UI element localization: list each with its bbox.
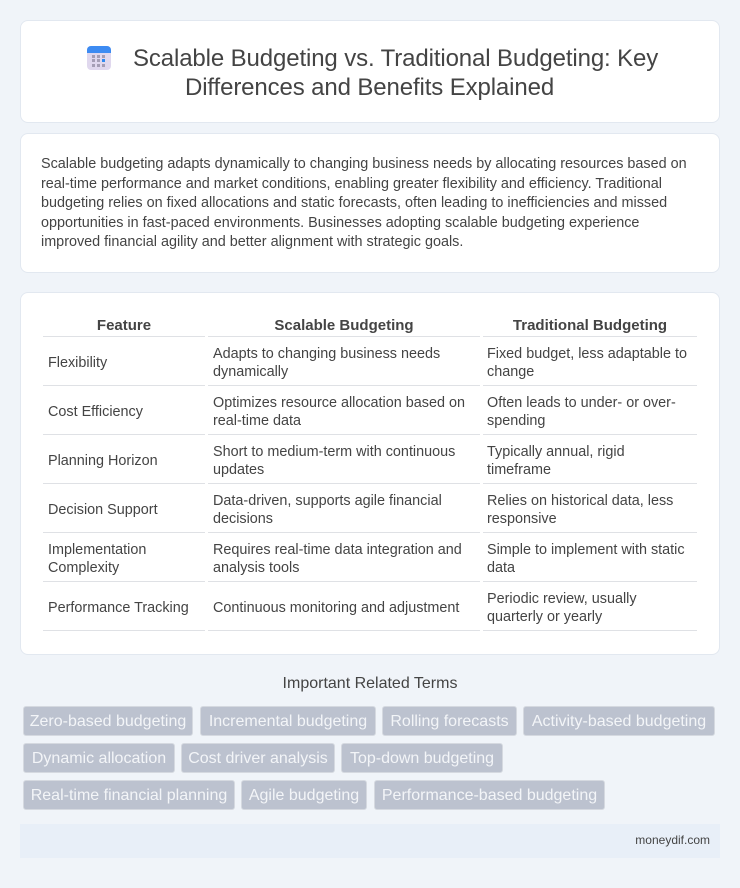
tag: Cost driver analysis	[188, 750, 328, 767]
cell: Periodic review, usually	[487, 591, 637, 607]
row: Flexibility: Flexibility	[48, 355, 107, 371]
cell: Relies on historical data, less	[487, 493, 673, 509]
related terms tags	[23, 706, 715, 810]
row: Cost Efficiency: Cost Efficiency	[48, 404, 143, 420]
icon: calendar	[87, 46, 111, 70]
tag	[181, 743, 335, 773]
cell	[487, 444, 625, 478]
cell	[487, 542, 685, 576]
cell: Requires real-time data integration and	[213, 542, 462, 558]
cell: Data-driven, supports agile financial	[213, 493, 442, 509]
tag	[382, 706, 517, 736]
row: Implementation Complexity: Implementation	[48, 542, 146, 558]
cell	[487, 395, 676, 429]
intro paragraph: improved financial agility and better alignment with strategic goals.	[41, 234, 463, 250]
cell: change	[487, 364, 534, 380]
tag	[23, 743, 175, 773]
cell	[213, 542, 462, 576]
intro paragraph: budgeting relies on fixed allocations and static forecasts, often leading to inefficiencies and missed	[41, 195, 667, 211]
tag: Dynamic allocation	[32, 750, 166, 767]
tag: Top-down budgeting	[350, 750, 494, 767]
cell	[213, 444, 455, 478]
cell	[213, 493, 442, 527]
panel: comparison table card	[20, 292, 720, 655]
row: Implementation Complexity	[48, 542, 146, 576]
cell: Simple to implement with static	[487, 542, 685, 558]
title: Scalable Budgeting vs. Traditional Budgeting: Key	[133, 45, 658, 72]
cell	[487, 591, 637, 625]
cell: decisions	[213, 511, 273, 527]
tag: Zero-based budgeting	[30, 713, 186, 730]
cell: Short to medium-term with continuous	[213, 444, 455, 460]
tag	[241, 780, 367, 810]
tag	[374, 780, 605, 810]
cell: spending	[487, 413, 545, 429]
cell: responsive	[487, 511, 557, 527]
header: Feature: Feature	[97, 317, 151, 334]
tag: Activity-based budgeting	[532, 713, 706, 730]
heading: related terms: Important Related Terms	[283, 675, 457, 692]
cell: Fixed budget, less adaptable to	[487, 346, 687, 362]
tag	[341, 743, 503, 773]
cell: Adapts to changing business needs	[213, 346, 440, 362]
footer bar	[20, 824, 720, 858]
cell: Optimizes resource allocation based on	[213, 395, 465, 411]
tag	[23, 780, 235, 810]
cell: updates	[213, 462, 264, 478]
header: Traditional Budgeting: Traditional Budgeting	[513, 317, 667, 334]
cell: Typically annual, rigid	[487, 444, 625, 460]
tag: Real-time financial planning	[31, 787, 227, 804]
row: Implementation Complexity: Complexity	[48, 560, 119, 576]
comparison table	[43, 317, 697, 631]
row: Decision Support: Decision Support	[48, 502, 158, 518]
title	[133, 45, 658, 101]
intro paragraph: real-time performance and market conditions, enabling greater flexibility and efficiency. Traditional	[41, 176, 662, 192]
cell: analysis tools	[213, 560, 299, 576]
tag	[523, 706, 715, 736]
header: Scalable Budgeting: Scalable Budgeting	[274, 317, 414, 334]
cell: Often leads to under- or over-	[487, 395, 676, 411]
tag: Agile budgeting	[249, 787, 359, 804]
cell: quarterly or yearly	[487, 609, 602, 625]
tag: Incremental budgeting	[209, 713, 367, 730]
cell: Continuous monitoring and adjustment	[213, 600, 459, 616]
panel: title card	[20, 20, 720, 123]
footer: source: moneydif.com	[635, 833, 710, 847]
cell: data	[487, 560, 515, 576]
cell	[487, 346, 687, 380]
row: Planning Horizon: Planning Horizon	[48, 453, 158, 469]
tag: Performance-based budgeting	[382, 787, 597, 804]
intro paragraph: opportunities in fast-paced environments. Businesses adopting scalable budgeting experience	[41, 215, 639, 231]
tag	[200, 706, 376, 736]
cell	[487, 493, 673, 527]
row: Performance Tracking: Performance Tracking	[48, 600, 189, 616]
cell: timeframe	[487, 462, 551, 478]
cell	[213, 395, 465, 429]
cell	[213, 346, 440, 380]
cell: dynamically	[213, 364, 288, 380]
intro paragraph: Scalable budgeting adapts dynamically to changing business needs by allocating resources based on	[41, 156, 687, 172]
cell: real-time data	[213, 413, 301, 429]
tag: Rolling forecasts	[390, 713, 509, 730]
panel: intro text card	[20, 133, 720, 273]
tag	[23, 706, 193, 736]
intro paragraph	[41, 156, 687, 250]
title: Differences and Benefits Explained	[185, 74, 554, 101]
